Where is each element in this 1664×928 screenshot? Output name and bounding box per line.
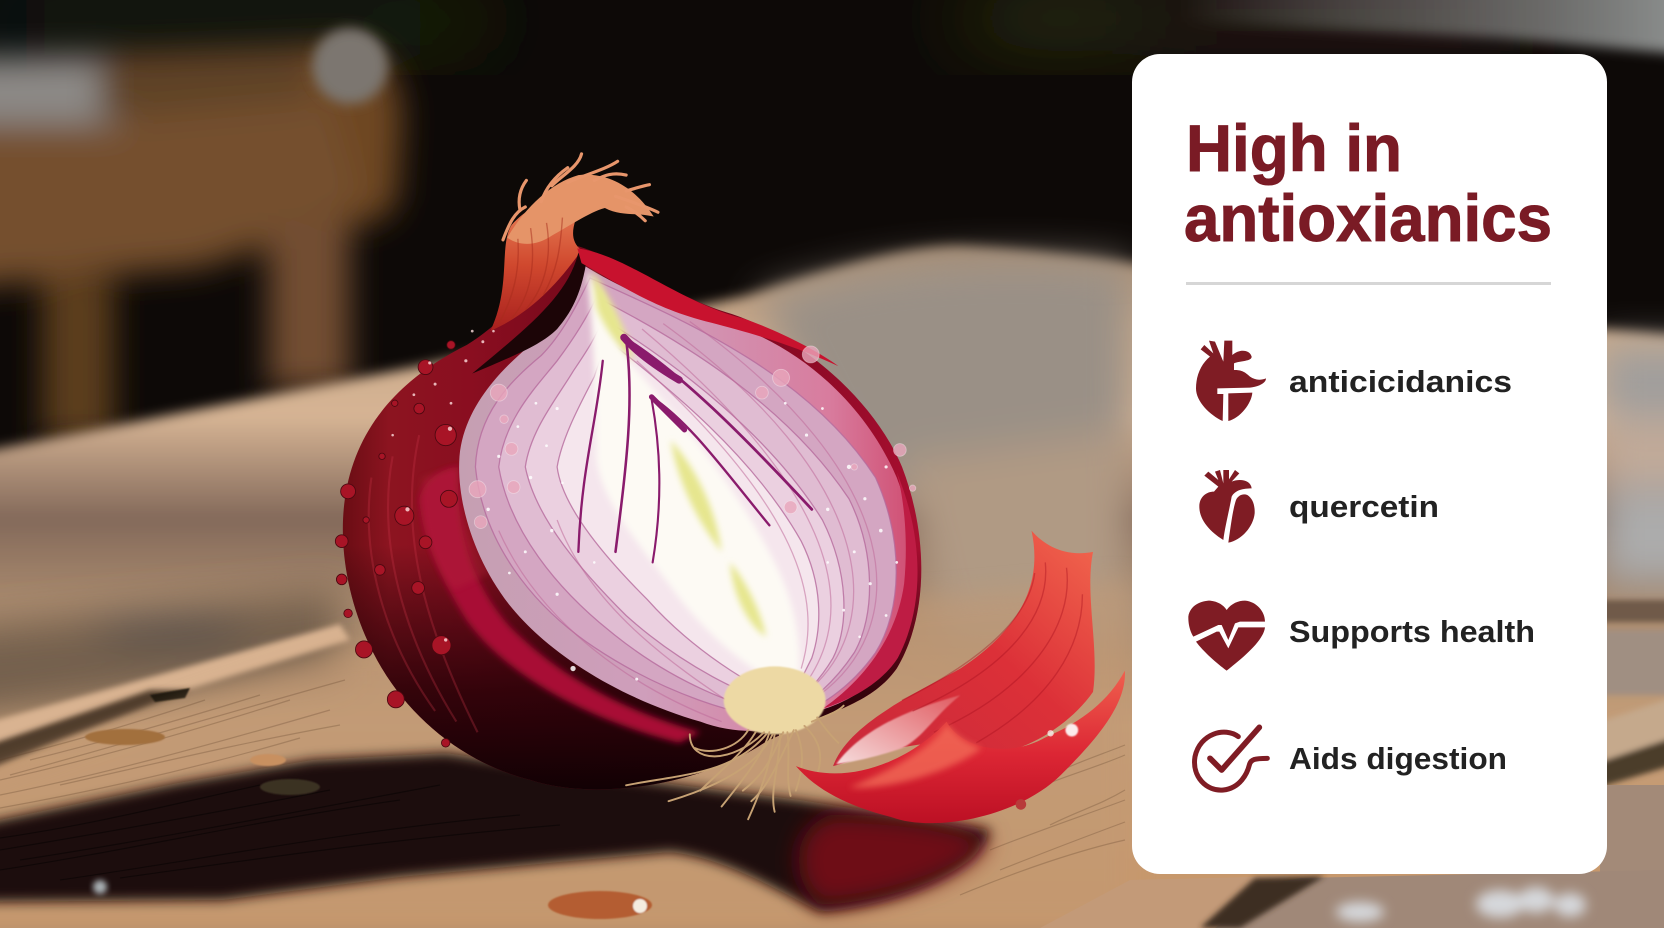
- dark crease at top of face: [472, 253, 586, 374]
- peel: back piece: [833, 531, 1095, 766]
- label: Aids digestion: [1289, 741, 1507, 776]
- title: High in: [1186, 111, 1402, 185]
- droplets on the skin: [335, 330, 495, 747]
- water puddles on wood: [85, 729, 652, 919]
- fine white water speckles: [486, 402, 898, 681]
- onion base: [724, 666, 826, 734]
- white onion core: [587, 271, 800, 692]
- info card: [1132, 54, 1607, 874]
- icon: anatomical heart: [1196, 341, 1266, 421]
- onion roots: [626, 706, 844, 819]
- droplets on the cut face: [469, 346, 916, 528]
- yellow highlights: [592, 271, 766, 637]
- row 1: anatomical heart icon and label: [1196, 341, 1512, 421]
- warm foreground wood: [0, 580, 1130, 928]
- divider: [1186, 282, 1551, 285]
- onion neck and tuft: [490, 154, 658, 331]
- label: anticicidanics: [1289, 364, 1512, 399]
- onion cut face with rings: [459, 248, 918, 731]
- onion outer skin: [343, 246, 921, 789]
- wood grain lines: [0, 680, 1125, 895]
- table shadow: [0, 753, 990, 912]
- right lower planks: [1060, 870, 1664, 928]
- row 4: check icon and label: [1195, 727, 1507, 790]
- icon: split heart: [1199, 470, 1255, 543]
- row 2: heart icon and label: [1199, 470, 1439, 543]
- label: quercetin: [1289, 489, 1439, 524]
- purple inner lines: [578, 337, 812, 562]
- icon: checkmark in circle: [1195, 727, 1267, 790]
- row 3: heartbeat icon and label: [1188, 601, 1535, 671]
- extra ring lines: [499, 322, 877, 722]
- onion photo: [335, 154, 1125, 823]
- peel: front piece: [796, 671, 1125, 823]
- chair: [0, 28, 402, 440]
- table surface: [0, 560, 1664, 928]
- label: Supports health: [1289, 614, 1535, 649]
- title: [1184, 111, 1552, 255]
- icon: heart with pulse: [1188, 601, 1265, 671]
- title: antioxianics: [1184, 181, 1552, 255]
- plank edge: [0, 624, 350, 753]
